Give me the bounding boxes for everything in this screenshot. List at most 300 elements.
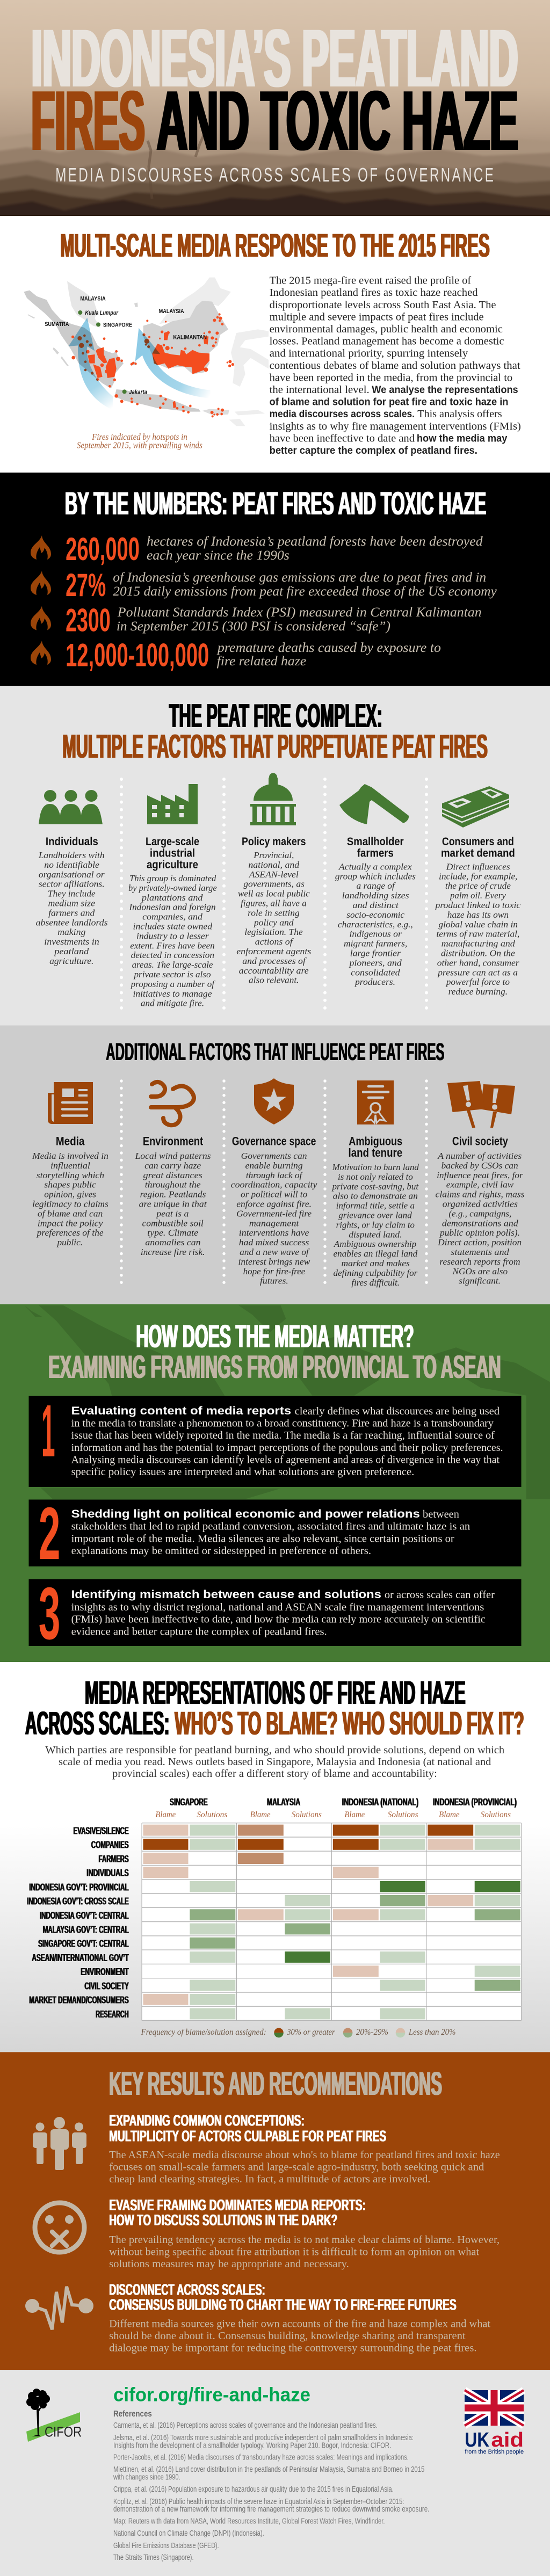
icon: disconnected signal [25,2287,93,2330]
column: civil society: statements and [451,1247,510,1258]
icon: capitol [250,773,296,825]
column: policy makers: ASEAN-level [248,870,299,880]
intro paragraph: better capture the complex of peatland fires. [270,445,477,456]
icon: protest signs [447,1081,515,1128]
column: civil society: research reports from [439,1257,520,1267]
result: evasive framing [109,2197,500,2270]
intro paragraph: of blame and solution for peat fire and toxic haze in [270,396,508,408]
heading: KEY RESULTS AND RECOMMENDATIONS [109,2065,442,2102]
column: large-scale industrial agriculture: Indonesian and foreign [128,902,216,912]
column: consumers and market demand: haze has its own [447,910,509,920]
intro paragraph: environmental damages, public health and economic [270,323,503,335]
column: governance space: futures. [260,1276,288,1286]
column: civil society: Direct action, position [437,1238,522,1248]
stat: 12,000-100,000: fire related haze [217,654,306,669]
stat: 260,000 [66,531,483,567]
intro paragraph [270,274,521,456]
map of fires and winds: MALAYSIA [159,308,184,315]
column: governance space: had mixed success [239,1238,309,1248]
column: environment: anomalies can [145,1238,201,1248]
column: civil society: example, civil law [446,1180,514,1190]
column: large-scale industrial agriculture: areas. The large-scale [132,960,213,970]
box 2: shedding light: 2 [39,1491,60,1575]
legend [140,2027,456,2037]
references: References [113,2409,152,2419]
column: smallholder farmers: group which includes [335,872,416,882]
box 1: evaluating content: specific policy issues are interpreted and what solutions are given preference. [71,1465,414,1478]
column: civil society: A number of activities [437,1151,522,1162]
logo: CIFOR [26,2389,82,2442]
column: large-scale industrial agriculture: and mitigate fire. [141,998,204,1008]
legend: Less than 20% [408,2027,456,2037]
column: environment: are unique in that [139,1199,207,1209]
column: civil society: public opinion polls). [439,1228,520,1238]
table column headers: MALAYSIA [267,1797,300,1808]
table row labels: FARMERS [99,1854,129,1865]
intro text [45,1744,505,1780]
column: smallholder farmers: producers. [354,977,395,988]
intro paragraph: We analyse the representations [372,384,518,396]
logo: UK aid [465,2428,524,2455]
box 1: evaluating content: 1 [41,1389,55,1472]
column: large-scale industrial agriculture: agriculture [147,858,198,871]
stat: 27% [66,567,497,603]
intro paragraph: contentious debates of blame and solution pathways that [270,359,520,372]
result: expanding common conceptions: cheap land clearing strategies. In fact, a multitude of actors are involved. [109,2173,430,2185]
intro paragraph: have been reported in the media, from the provincial to [270,372,512,383]
result: evasive framing: EVASIVE FRAMING DOMINATES MEDIA REPORTS: [109,2197,366,2214]
panel: additional factors [0,1026,550,1304]
column: ambiguous land tenure: grievance over land [338,1210,412,1221]
column: large-scale industrial agriculture: detected in concession [131,950,214,961]
table row labels [27,1826,129,2020]
result: expanding common conceptions: MULTIPLICITY OF ACTORS CULPABLE FOR PEAT FIRES [109,2128,386,2145]
panel: by the numbers [0,473,550,686]
column: large-scale industrial agriculture: by privately-owned large [128,883,217,894]
column: policy makers: legislation. The [244,927,303,938]
column: ambiguous land tenure: enables an illegal land [333,1249,418,1259]
column: civil society: demonstrations and [442,1218,519,1229]
column: policy makers: accountability are [239,966,309,976]
column: consumers and market demand: include, for example, [439,872,517,882]
icon: newspaper [48,1082,93,1124]
column: smallholder farmers: indigenous or [350,929,402,939]
column: smallholder farmers: landholding sizes [342,891,409,901]
box 3: identifying mismatch: (FMIs) have been ineffective to date, and how the media can rely more accurately on scientific [71,1613,486,1625]
column: smallholder farmers: migrant farmers, [344,939,407,949]
table row labels: EVASIVE/SILENCE [74,1826,129,1837]
column: environment: region. Peatlands [140,1189,206,1200]
icon: axe [339,784,409,824]
title line 2 [31,74,518,168]
box 1: evaluating content: clearly defines what discources are being used [295,1405,500,1417]
column: governance space: through lack of [246,1171,303,1181]
column: policy makers: governments, as [243,879,305,889]
column: smallholder farmers: farmers [357,847,394,859]
column: individuals: medium size [48,898,96,909]
box 2: shedding light: explanations may be omitted or sidestepped in preference of others. [71,1544,371,1557]
column: civil society: backed by CSOs can [442,1161,518,1171]
column: large-scale industrial agriculture: This group is dominated [129,874,216,884]
column: smallholder farmers: socio-economic [346,910,405,920]
box 1: evaluating content: in the media to translate a phenomenon to a broad constituency. Fire and haze is a transboundary [71,1417,494,1429]
column: ambiguous land tenure: defining culpability for [333,1268,418,1279]
map of fires and winds: SUMATRA [45,321,69,328]
references: demonstration of a new framework for informing fire management strategies to reduce downwind smoke exposure. [113,2505,429,2514]
intro paragraph: the international level. [270,383,370,396]
column: environment: combustible soil [142,1218,204,1229]
table row labels: MALAYSIA GOV’T: CENTRAL [43,1925,129,1935]
logo: UK aid: from the British people [465,2449,524,2455]
website link: cifor.org/fire-and-haze [113,2384,310,2406]
table row labels: RESEARCH [96,2009,129,2020]
references: Miettinen, et al. (2016) Land cover distribution in the peatlands of Peninsular Malaysia, Sumatra and Borneo in 2015 [113,2465,424,2474]
box 1: evaluating content: issue that has been widely reported in the media. The media is a far reaching, influential source of [71,1429,495,1441]
table column headers: Solutions [292,1810,322,1819]
intro paragraph: have been ineffective to date and [270,432,415,444]
stat: 27%: of Indonesia’s greenhouse gas emissions are due to peat fires and in [113,570,486,585]
box 2: shedding light: between [423,1508,460,1520]
column: consumers and market demand: distribution. On the [441,948,516,959]
result: evasive framing: The prevailing tendency across the media is to not make clear claims of blame. However, [109,2233,500,2246]
intro paragraph: This analysis offers [417,408,502,420]
map caption [77,433,202,451]
column: ambiguous land tenure: rights, or lay claim to [336,1220,415,1230]
result: expanding common conceptions: The ASEAN-scale media discourse about who's to blame for peatland fires and toxic haze [109,2149,500,2161]
column: individuals: agriculture. [49,956,93,967]
map of fires and winds: Kuala Lumpur [85,310,118,316]
map of fires and winds: KALIMANTAN [173,335,207,341]
box 3: identifying mismatch: 3 [39,1571,60,1655]
box 2: shedding light: stakeholders that led to rapid peatland conversion, associated fires and ultimate haze is an [71,1520,471,1532]
references: Crippa, et al. (2016) Population exposure to hazardous air quality due to the 2015 fires in Equatorial Asia. [113,2485,394,2494]
icon: shield [254,1078,294,1124]
column: ambiguous land tenure: Ambiguous [349,1135,402,1148]
column: large-scale industrial agriculture: plantations and [141,893,204,903]
column: ambiguous land tenure [331,1135,419,1288]
column: consumers and market demand [435,835,521,997]
references: Map: Reuters with data from NASA, World Resources Institute, Global Forest Watch Fires, Windfinder. [113,2517,385,2526]
column: policy makers: also relevant. [249,975,299,985]
result: expanding common conceptions: EXPANDING COMMON CONCEPTIONS: [109,2113,305,2130]
column: policy makers: actions of [255,937,294,947]
table row labels: SINGAPORE GOV’T: CENTRAL [38,1939,129,1949]
box 3: identifying mismatch: Identifying mismatch between cause and solutions [71,1588,381,1601]
column: governance space: coordination, capacity [231,1180,317,1190]
column: consumers and market demand: terms of raw material, [436,929,519,939]
column: smallholder farmers: Smallholder [347,835,404,848]
result: disconnect across scales: Different media sources give their own accounts of the fire and haze complex and what [109,2318,490,2330]
column: governance space: enable burning [245,1161,303,1171]
box 1: evaluating content: Analysing media discourses can identify levels of agreement and areas of divergence in the way that [71,1454,500,1465]
heading: THE PEAT FIRE COMPLEX: [169,698,382,735]
column: media: public. [56,1238,83,1248]
column: governance space: or political will to [241,1189,307,1200]
column: consumers and market demand: manufacturing and [442,939,516,949]
table column headers: Blame [155,1810,176,1819]
column: media: Media [56,1135,85,1148]
references: Carmenta, et al. (2016) Perceptions across scales of governance and the Indonesian peatland fires. [113,2421,378,2430]
column: media [32,1135,108,1248]
map caption: September 2015, with prevailing winds [77,441,202,451]
icon: flame [31,535,51,560]
intro paragraph: insights as to why fire management interventions (FMIs) [270,420,521,432]
column: civil society: Civil society [452,1135,508,1148]
references: National Council on Climate Change (DNPI) (Indonesia). [113,2529,264,2538]
column: large-scale industrial agriculture: Large-scale [146,835,199,848]
icon: flame [31,641,51,665]
intro paragraph: and international priority, spurring intensely [270,347,468,359]
table column headers: Solutions [388,1810,418,1819]
references: Koplitz, et al. (2016) Public health impacts of the severe haze in Equatorial Asia in September–October 2015: [113,2497,404,2506]
intro paragraph: The 2015 mega-fire event raised the profile of [270,274,471,286]
column: consumers and market demand: global value chain in [438,920,518,930]
column: individuals: sector afiliations. [39,879,105,889]
column: environment: increase fire risk. [141,1247,205,1258]
column: environment: Local wind patterns [134,1151,211,1162]
references: The Straits Times (Singapore). [113,2553,194,2562]
column: smallholder farmers [335,835,416,988]
map of fires and winds [24,278,269,426]
column: large-scale industrial agriculture: includes state owned [133,921,213,932]
column: policy makers: national, and [248,860,300,870]
stat: 260,000: each year since the 1990s [147,548,290,563]
column: governance space: management [249,1218,300,1229]
intro paragraph: media discourses across scales. [270,409,415,420]
map of fires and winds: MALAYSIA [80,295,106,302]
logo: CIFOR: CIFOR [45,2423,82,2440]
box 3: identifying mismatch [29,1571,521,1655]
table row labels: INDONESIA GOV’T: PROVINCIAL [29,1882,129,1893]
references: Porter-Jacobs, et al. (2016) Media discourses of transboundary haze across scales: Meanings and implications. [113,2453,409,2462]
column: governance space: and a new wave of [240,1247,310,1258]
result: disconnect across scales [109,2282,490,2354]
column: consumers and market demand: pressure can act as a [437,968,518,978]
table row labels: ASEAN/INTERNATIONAL GOV’T [32,1953,129,1964]
stat: 260,000: 260,000 [66,531,140,567]
box 2: shedding light: important role of the media. Media silences are also relevant, since certain positions or [71,1533,454,1544]
stat: 27%: 27% [66,567,106,603]
column: media: influential [50,1161,90,1171]
stat: 2300: in September 2015 (300 PSI is considered “safe”) [117,619,390,634]
stat: 12,000-100,000: 12,000-100,000 [66,637,209,673]
column: large-scale industrial agriculture: private sector is also [133,970,211,980]
references: Insights from the development of a smallholder typology. Working Paper 210. Bogor, Indonesia: CIFOR. [113,2441,391,2450]
result: disconnect across scales: should be done about it. Consensus building, knowledge sharing and transparent [109,2330,466,2342]
column: civil society: influence peat fires, for [437,1171,523,1181]
icon: people [39,790,103,824]
references: Jelsma, et al. (2016) Towards more sustainable and productive independent oil palm smallholders in Indonesia: [113,2433,414,2442]
table column headers: Solutions [197,1810,227,1819]
column: large-scale industrial agriculture: industry to a lesser [136,931,209,941]
column: large-scale industrial agriculture [128,835,217,1008]
intro text: Which parties are responsible for peatland burning, and who should provide solutions, depend on which [45,1744,505,1756]
column: individuals: They include [48,889,96,899]
column: consumers and market demand: Direct influences [446,862,510,872]
stat: 2300: Pollutant Standards Index (PSI) measured in Central Kalimantan [117,605,482,620]
column: civil society: claims and rights, mass [436,1189,525,1200]
box 3: identifying mismatch: or across scales can offer [385,1588,495,1601]
column: policy makers: well as local public [238,889,310,899]
column: smallholder farmers: characteristics, e.g., [338,920,413,930]
heading [48,1318,501,1385]
heading: HOW DOES THE MEDIA MATTER? [136,1318,414,1354]
logo: UK aid: aid [491,2428,524,2451]
icon: wind [151,1082,194,1125]
table column headers: INDONESIA (PROVINCIAL) [433,1797,517,1808]
box 1: evaluating content [29,1389,521,1487]
heading: ACROSS SCALES: [25,1704,169,1741]
logo: UK flag [465,2390,524,2426]
map of fires and winds: Jakarta [129,389,147,395]
table row labels: INDONESIA GOV’T: CENTRAL [40,1911,129,1921]
column: media: storytelling which [37,1171,104,1181]
column: consumers and market demand: reduce burning. [448,987,508,997]
icon: factory [147,784,198,824]
table column headers: Blame [344,1810,365,1819]
column: individuals: peatland [54,947,89,957]
references: Global Fire Emissions Database (GFED). [113,2541,219,2550]
column: environment: type. Climate [147,1228,199,1238]
subtitle: MEDIA DISCOURSES ACROSS SCALES OF GOVERNANCE [55,164,495,186]
intro paragraph: losses. Peatland management has become a domestic [270,335,504,347]
map of fires and winds: SINGAPORE [103,322,132,328]
column: individuals: investments in [44,937,99,947]
heading: ADDITIONAL FACTORS THAT INFLUENCE PEAT FIRES [106,1039,445,1066]
column: media: legitimacy to claims [32,1199,108,1209]
table column headers: Solutions [481,1810,511,1819]
icon: land certificate [357,1080,394,1124]
table column headers: INDONESIA (NATIONAL) [342,1797,418,1808]
table row labels: MARKET DEMAND/CONSUMERS [29,1995,129,2006]
column: smallholder farmers: pioneers, and [349,958,402,968]
column: ambiguous land tenure: disputed land. [349,1230,402,1240]
column: environment [134,1135,211,1258]
column: consumers and market demand: market demand [441,847,515,859]
legend: Frequency of blame/solution assigned: [140,2027,266,2037]
heading [62,698,488,765]
column: media: preferences of the [36,1228,104,1238]
column: civil society: organized activities [443,1199,518,1209]
intro text: scale of media you read. News outlets based in Singapore, Malaysia and Indonesia (at national and [59,1755,491,1768]
column: smallholder farmers: large frontier [350,948,401,959]
column: civil society: NGOs are also [452,1267,508,1277]
column: ambiguous land tenure: is not only related to [338,1172,413,1182]
map caption: Fires indicated by hotspots in [91,433,187,442]
column: environment: Environment [143,1135,203,1148]
icon: flame [31,571,51,595]
column: policy makers: role in setting [248,908,300,918]
table: blame and solutions matrix [142,1823,521,2020]
column: policy makers: policy and [254,918,294,928]
table row labels: ENVIRONMENT [81,1967,129,1978]
panel: media representations [0,1662,550,2052]
box 1: evaluating content: information and has the potential to impact perceptions of the populous and their policy preferences. [71,1441,503,1454]
title line 2: FIRES [31,74,145,168]
result: evasive framing: solutions measures may be appropriate and necessary. [109,2258,349,2270]
column: ambiguous land tenure: Ambiguous ownership [334,1239,416,1250]
column: civil society: (e.g., campaigns, [448,1209,511,1219]
column: large-scale industrial agriculture: companies, and [142,912,203,922]
column: ambiguous land tenure: Motivation to burn land [331,1163,419,1173]
column: governance space [231,1135,317,1286]
column: governance space: Government-led fire [236,1209,312,1219]
column: consumers and market demand: product linked to toxic [435,901,521,911]
column: environment: throughout the [145,1180,201,1190]
column: media: opinion, gives [44,1189,96,1200]
icon: three figures [33,2117,86,2170]
column: civil society: significant. [459,1276,501,1286]
column: media: shapes public [44,1180,97,1190]
stat: 2300: 2300 [66,602,111,638]
column: consumers and market demand: Consumers and [442,835,514,848]
result: disconnect across scales: CONSENSUS BUILDING TO CHART THE WAY TO FIRE-FREE FUTURES [109,2297,457,2314]
column: media: of blame and can [38,1209,103,1219]
panel: multi-scale media response [0,216,550,473]
intro paragraph: how the media may [417,433,508,444]
table column headers: SINGAPORE [170,1797,208,1808]
column: large-scale industrial agriculture: industrial [150,847,195,859]
logo: UK aid: UK [465,2428,489,2451]
column: civil society [436,1135,525,1286]
result: disconnect across scales: DISCONNECT ACROSS SCALES: [109,2282,265,2299]
stat: 12,000-100,000: premature deaths caused by exposure to [216,640,441,655]
column: individuals [36,835,108,967]
panel: hero title [0,0,550,221]
table row labels: COMPANIES [91,1840,129,1851]
box 3: identifying mismatch: evidence and better capture the complex of peatland fires. [71,1626,327,1637]
column: smallholder farmers: and distinct [352,901,399,911]
column: policy makers: Provincial, [253,851,294,861]
table column headers: Blame [439,1810,460,1819]
heading [25,1674,524,1741]
result: expanding common conceptions: focuses on small-scale farmers and large-scale agro-industry, both seeking quick and [109,2161,484,2173]
box 1: evaluating content: Evaluating content of media reports [71,1404,291,1417]
column: governance space: hope for fire-free [243,1267,306,1277]
column: individuals: Landholders with [38,851,105,861]
column: ambiguous land tenure: land tenure [349,1146,402,1159]
column: policy makers: Policy makers [242,835,306,848]
column: environment: can carry haze [144,1161,201,1171]
result: expanding common conceptions [109,2113,500,2185]
column: policy makers: enforcement agents [236,947,312,957]
column: individuals: Individuals [46,835,98,848]
icon: flame [31,606,51,630]
box 3: identifying mismatch: insights as to why district regional, national and ASEAN scale fire management interventions [71,1601,484,1613]
column: governance space: Governance space [232,1135,316,1148]
column: individuals: no identifiable [44,860,100,870]
stat: 27%: 2015 daily emissions from peat fire exceeded those of the US economy [113,584,497,599]
column: individuals: organisational or [39,870,105,880]
stat: 12,000-100,000 [66,637,441,673]
table row labels: INDIVIDUALS [86,1868,129,1879]
column: individuals: absentee landlords [36,918,108,928]
column: consumers and market demand: other hand, consumer [437,958,519,968]
column: large-scale industrial agriculture: initiatives to manage [133,989,212,999]
panel: footer and references [0,2370,550,2576]
legend: 30% or greater [286,2027,336,2037]
column: environment: great distances [143,1171,202,1181]
column: policy makers [236,835,312,985]
panel: how does the media matter [0,1304,550,1662]
panel: key results and recommendations [0,2052,550,2370]
column: ambiguous land tenure: market and makes [341,1259,410,1269]
result: evasive framing: without being specific about fire attribution it is difficult to form an opinion on what [109,2246,480,2258]
column: consumers and market demand: the price of crude [445,881,511,891]
column: media: impact the policy [38,1218,103,1229]
column: media: Media is involved in [32,1151,108,1162]
stat: 2300 [66,602,482,638]
